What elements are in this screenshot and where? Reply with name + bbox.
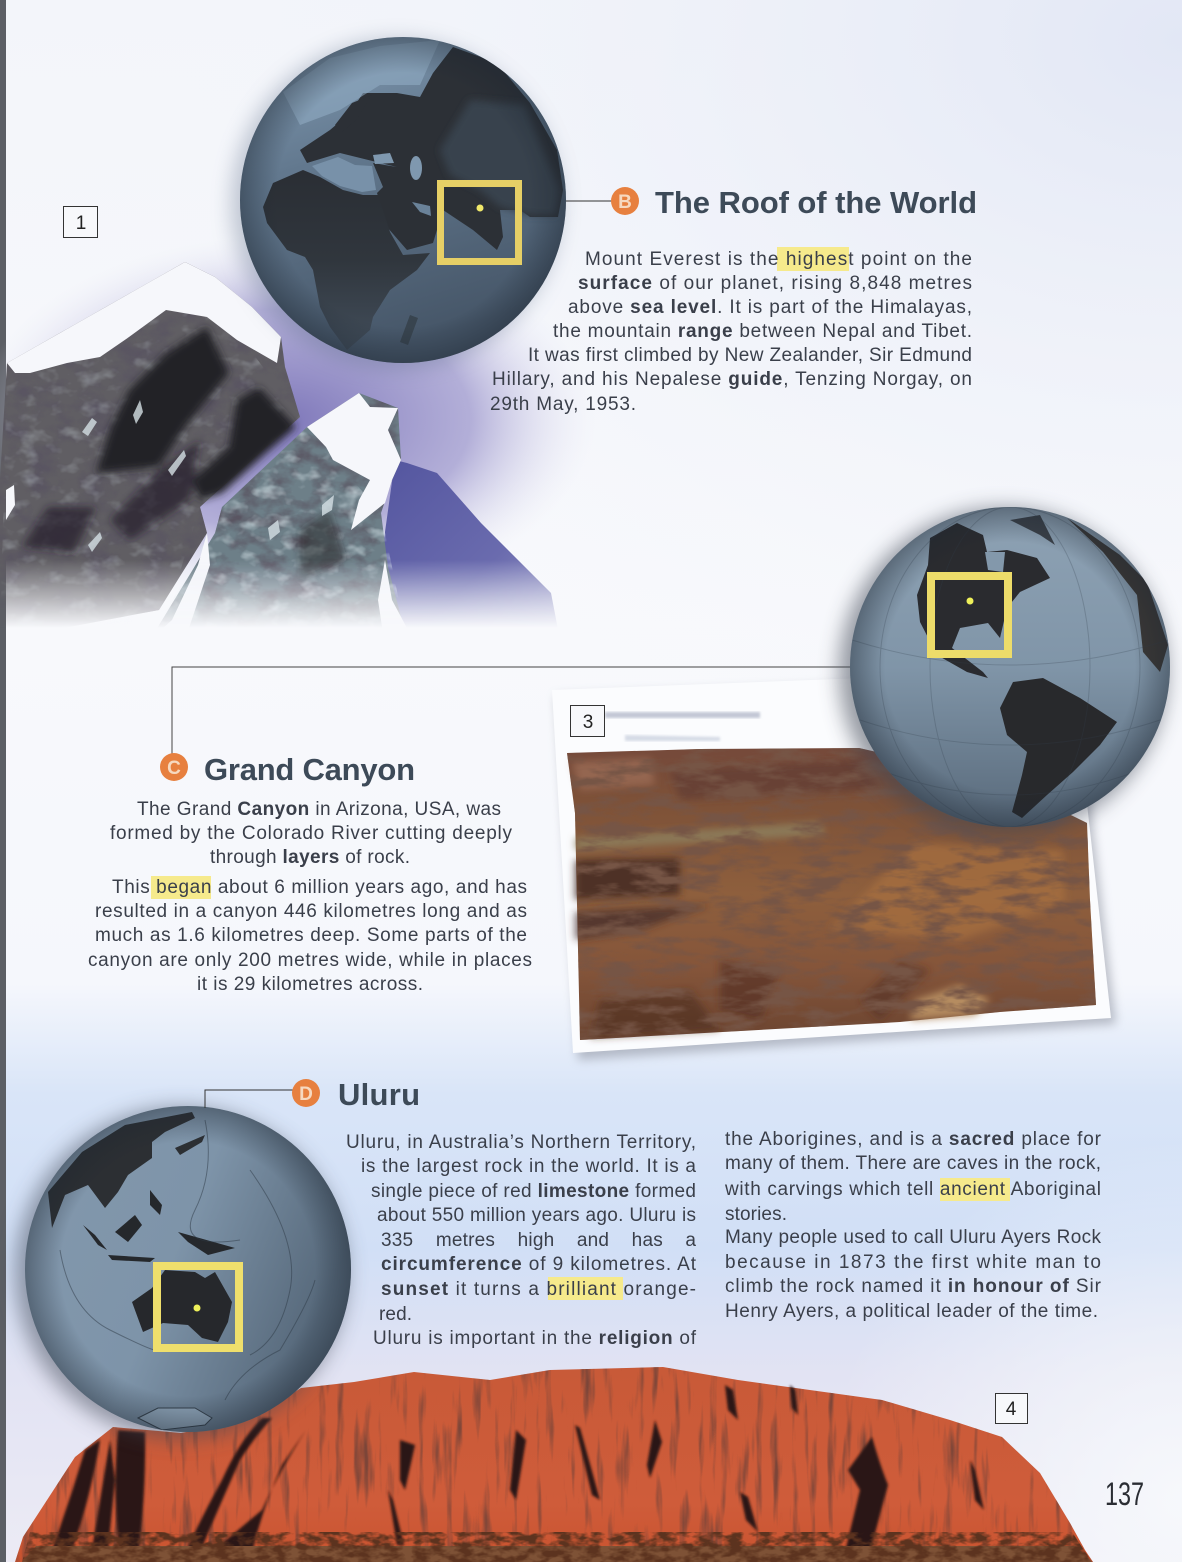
- text block: Uluru column 2: many of them. There are caves in the rock,: [725, 1153, 1101, 1174]
- text block: Uluru column 1: red.: [379, 1304, 412, 1325]
- text block: Uluru column 2: because in 1873 the first white man to: [725, 1252, 1101, 1273]
- text block: Uluru column 1: circumference of 9 kilometres. At: [381, 1254, 697, 1275]
- locator box: [440, 184, 518, 262]
- continent: Africa: [263, 170, 430, 350]
- label 1: [64, 206, 98, 238]
- graticule: [852, 507, 1168, 827]
- sky streaks: [605, 712, 760, 718]
- text block: Uluru column 1: sunset it turns a brilliant orange-: [381, 1279, 696, 1300]
- text block: Grand Canyon: This began about 6 million years ago, and has: [112, 877, 527, 898]
- text block: Grand Canyon: it is 29 kilometres across.: [197, 974, 423, 995]
- locator box: [931, 576, 1008, 654]
- text block: Uluru column 1: [346, 1132, 697, 1349]
- photo: Uluru: [15, 1367, 1093, 1562]
- canyon rock patches: [572, 758, 1065, 1038]
- ocean ridges: [60, 1120, 315, 1400]
- scrub at base: [22, 1546, 1092, 1562]
- text block: Uluru column 2: [724, 1129, 1102, 1322]
- back mountain: [370, 460, 560, 640]
- text block: Uluru column 2: the Aborigines, and is a sacred place for: [725, 1129, 1102, 1150]
- rock shadow streaks: [52, 1385, 984, 1552]
- text block: Uluru column 2: Henry Ayers, a political leader of the time.: [725, 1301, 1098, 1322]
- text block: Grand Canyon: [88, 799, 532, 995]
- text block: Uluru column 1: Uluru, in Australia’s Northern Territory,: [346, 1132, 696, 1153]
- continent: Asia: [48, 1112, 195, 1228]
- label 3: 3: [583, 712, 593, 733]
- marker C: C: [167, 758, 181, 779]
- marker D: D: [299, 1084, 313, 1105]
- text block: Everest: above sea level. It is part of the Himalayas,: [568, 297, 972, 318]
- text block: Uluru column 2: with carvings which tell ancient Aboriginal: [724, 1179, 1101, 1200]
- text block: Grand Canyon: resulted in a canyon 446 kilometres long and as: [95, 901, 527, 922]
- continent: South America: [1000, 678, 1117, 818]
- continent: Africa edge: [1067, 518, 1168, 672]
- heading: Grand Canyon: Grand Canyon: [204, 752, 415, 787]
- seas: [410, 156, 422, 180]
- globe: Asia and Australia: [15, 1106, 351, 1439]
- text block: Uluru column 2: climb the rock named it in honour of Sir: [725, 1276, 1102, 1297]
- heading: Uluru: Uluru: [338, 1077, 420, 1112]
- canyon picture: [567, 748, 1096, 1040]
- connector C: [172, 667, 860, 757]
- text block: Everest: surface of our planet, rising 8,848 metres: [578, 273, 972, 294]
- marker B: B: [618, 192, 632, 213]
- text block: Uluru column 1: Uluru is important in the religion of: [373, 1328, 697, 1349]
- label 4: 4: [1006, 1399, 1017, 1420]
- text block: Grand Canyon: The Grand Canyon in Arizona, USA, was: [137, 799, 501, 820]
- continent: North America: [917, 523, 1050, 678]
- rock flecks: [82, 400, 334, 552]
- text block: Uluru column 2: Many people used to call Uluru Ayers Rock: [725, 1227, 1102, 1248]
- connector B: [566, 200, 612, 202]
- label 4: [996, 1394, 1028, 1424]
- connector D: [205, 1090, 293, 1108]
- text block: Uluru column 1: single piece of red limestone formed: [371, 1181, 696, 1202]
- label 3: [570, 706, 604, 736]
- islands: [83, 1190, 235, 1262]
- marker B: [611, 187, 639, 215]
- text block: Uluru column 1: about 550 million years ago. Uluru is: [377, 1205, 696, 1226]
- marker D: [292, 1079, 320, 1107]
- text block: Uluru column 2: stories.: [725, 1204, 787, 1225]
- main rock face: [0, 262, 300, 640]
- continent: Australia: [132, 1270, 232, 1342]
- text block: Uluru column 1: is the largest rock in the world. It is a: [361, 1156, 696, 1177]
- second peak rock face: [162, 393, 401, 624]
- page number: 137: [1105, 1476, 1144, 1512]
- text block: Grand Canyon: canyon are only 200 metres wide, while in places: [88, 950, 532, 971]
- text block: Everest: 29th May, 1953.: [490, 394, 636, 415]
- text block: Everest: the mountain range between Nepal and Tibet.: [553, 321, 972, 342]
- heading: The Roof of the World: The Roof of the World: [655, 185, 977, 220]
- photo: Grand Canyon: [552, 670, 1116, 1060]
- text block: Everest: Hillary, and his Nepalese guide, Tenzing Norgay, on: [492, 369, 972, 390]
- text block: Everest: Mount Everest is the highest point on the: [585, 249, 972, 270]
- text block: Grand Canyon: through layers of rock.: [210, 847, 410, 868]
- globe: Americas: [839, 507, 1170, 836]
- photo: Mount Everest: [0, 258, 562, 624]
- text block: Grand Canyon: much as 1.6 kilometres deep. Some parts of the: [95, 925, 527, 946]
- snow caps: [6, 262, 408, 640]
- locator box: [157, 1266, 239, 1348]
- text block: Everest: It was first climbed by New Zealander, Sir Edmund: [528, 345, 972, 366]
- text block: Uluru column 1: 335 metres high and has a: [381, 1230, 696, 1251]
- continent: Eurasia: [300, 47, 563, 250]
- label 1: 1: [76, 213, 86, 234]
- globe: Eurasia and Africa: [231, 37, 566, 369]
- text block: Everest: [490, 247, 972, 415]
- dark rock patches: [22, 327, 345, 580]
- marker C: [160, 753, 188, 781]
- continent: Antarctica: [138, 1408, 212, 1430]
- text block: Grand Canyon: formed by the Colorado River cutting deeply: [110, 823, 512, 844]
